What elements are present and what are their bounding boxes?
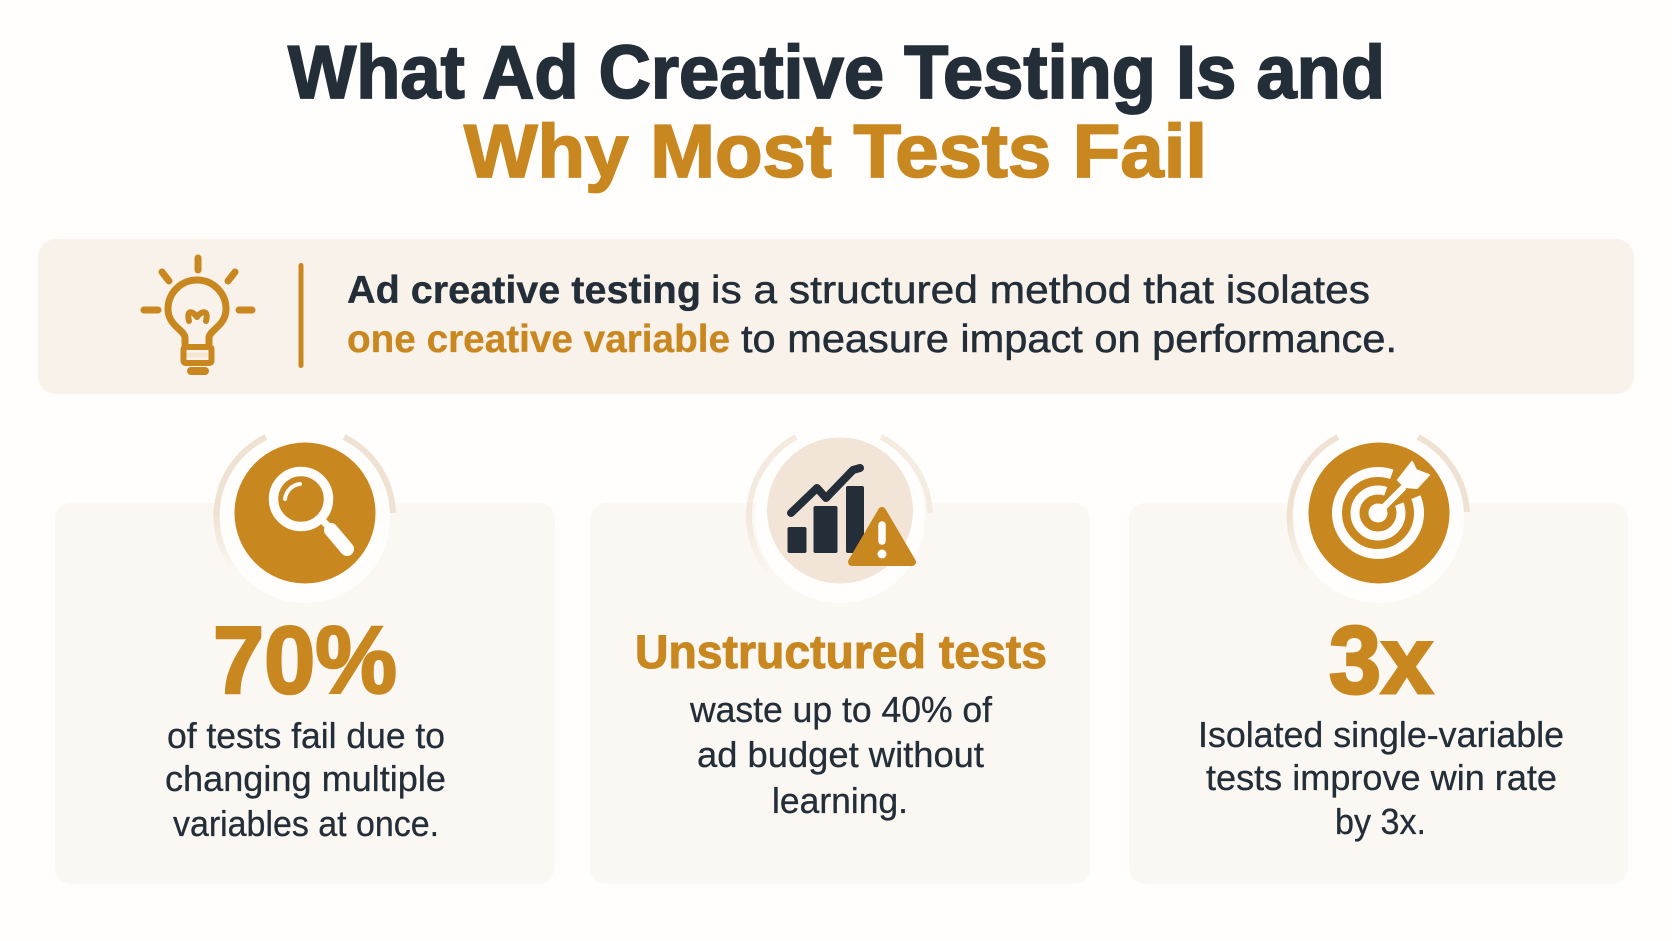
card text: [165, 715, 446, 844]
icon: target with arrow: [1290, 433, 1467, 603]
definition text: Ad creative testing: [347, 269, 701, 312]
panel: definition banner: [38, 239, 1634, 394]
card text: [689, 689, 993, 821]
card text: by 3x.: [1335, 801, 1426, 842]
stat: 70%: 70%: [213, 607, 397, 714]
definition text: to measure impact on performance.: [741, 318, 1397, 361]
card text: changing multiple: [165, 758, 446, 799]
card text: variables at once.: [173, 803, 439, 844]
stat: 3x: 3x: [1329, 607, 1433, 714]
panel: card 70%: [55, 433, 555, 884]
title: What Ad Creative Testing Is and: [288, 30, 1385, 114]
panel: card unstructured tests: [590, 433, 1090, 884]
card text: waste up to 40% of: [689, 689, 993, 730]
icon: magnifier badge: [217, 433, 393, 603]
panel: card 3x: [1129, 433, 1628, 884]
card text: of tests fail due to: [167, 715, 445, 756]
definition text: is a structured method that isolates: [711, 269, 1370, 312]
card text: learning.: [772, 780, 908, 821]
title: Why Most Tests Fail: [464, 109, 1207, 193]
definition text: [347, 269, 1397, 361]
definition text: one creative variable: [347, 318, 730, 361]
card text: tests improve win rate: [1206, 757, 1557, 798]
card text: ad budget without: [697, 734, 984, 775]
heading: unstructured tests: Unstructured tests: [635, 625, 1047, 678]
divider: [298, 263, 304, 368]
card text: [1198, 714, 1564, 842]
icon: light bulb: [144, 258, 252, 371]
icon: falling chart with warning: [749, 433, 930, 603]
title: [288, 30, 1385, 193]
card text: Isolated single-variable: [1198, 714, 1564, 755]
